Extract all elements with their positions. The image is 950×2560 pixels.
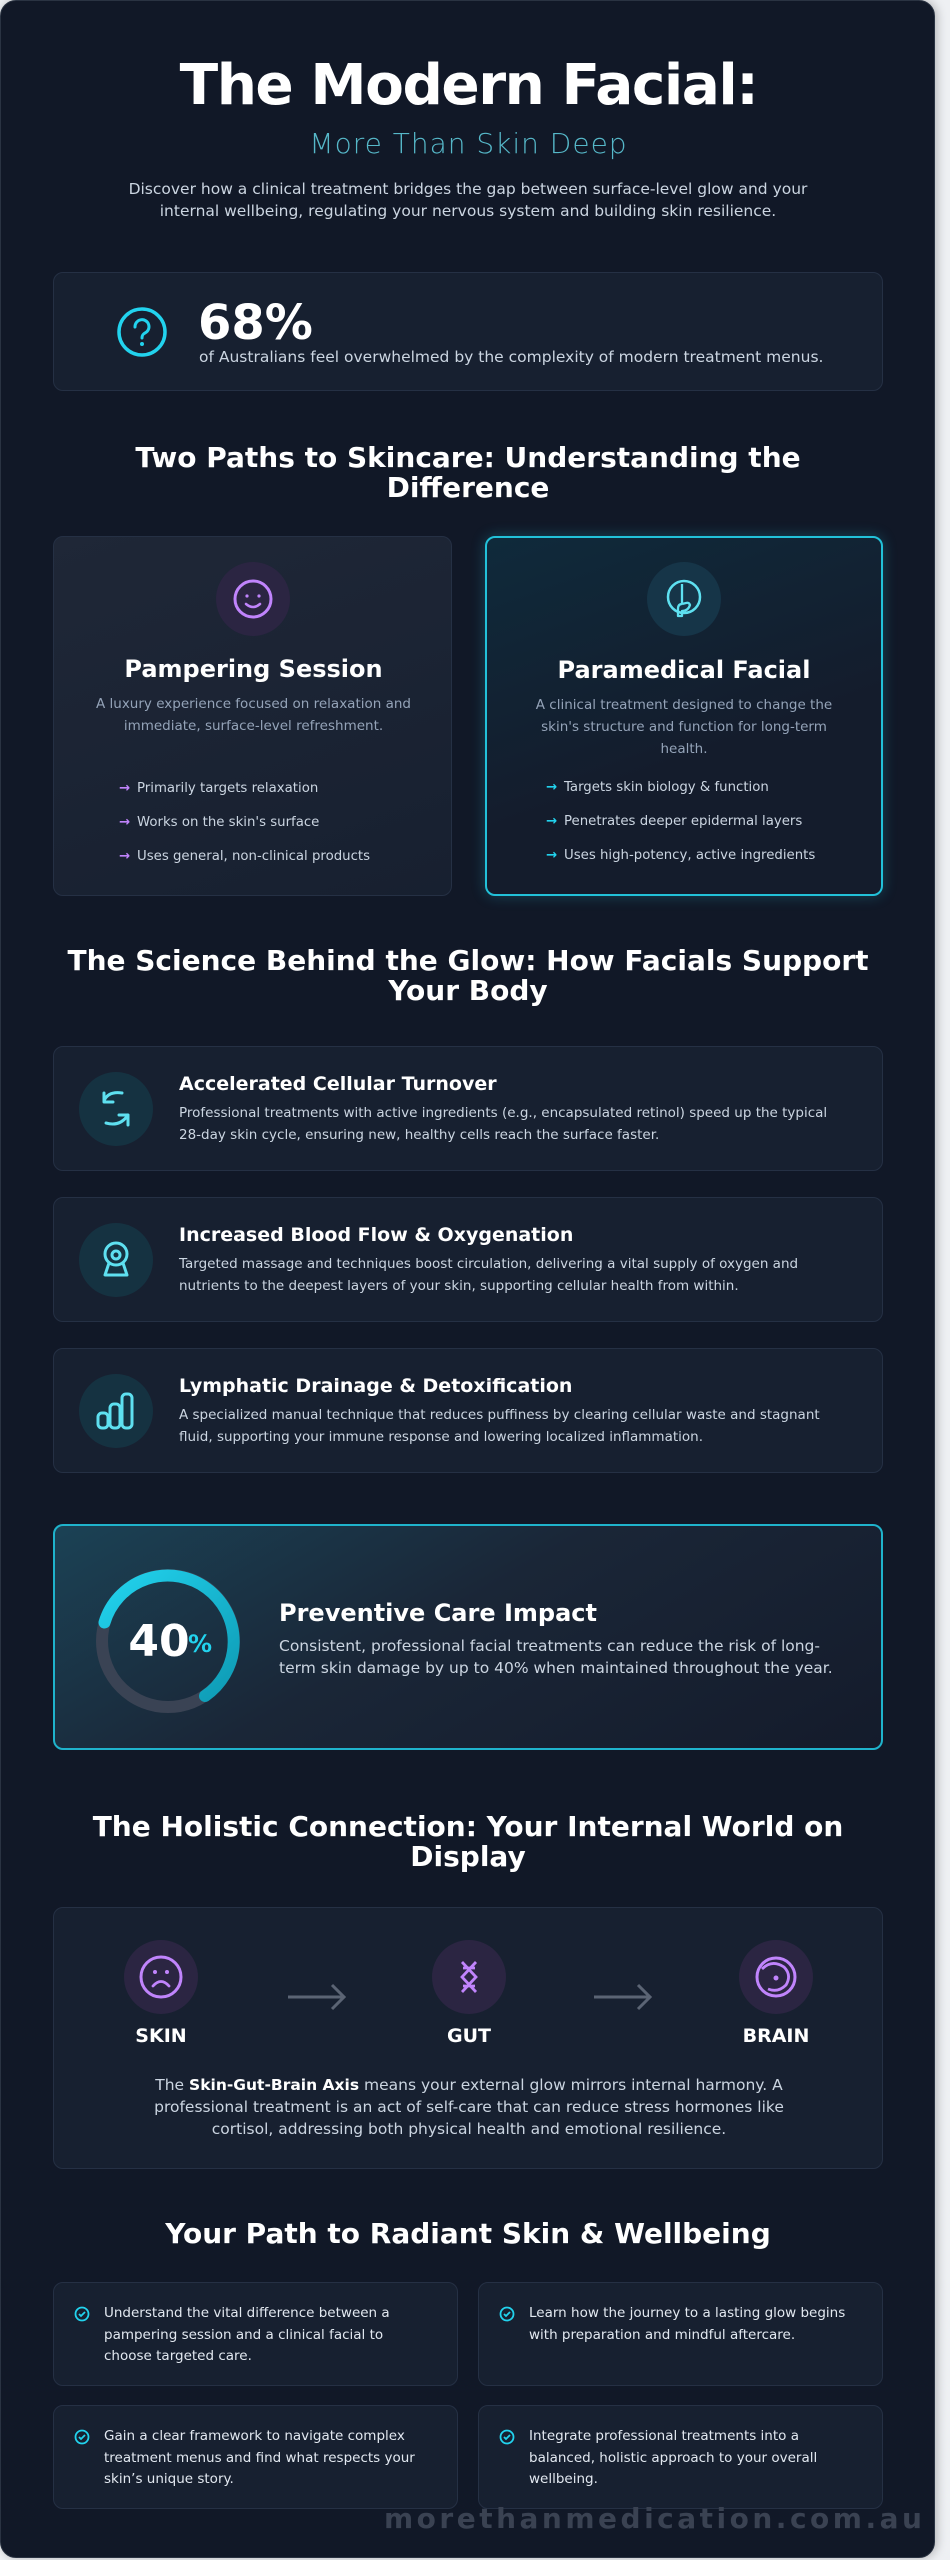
icon: gut xyxy=(432,1940,506,2014)
subtitle: More Than Skin Deep xyxy=(309,127,628,160)
bullet list xyxy=(119,781,370,864)
bullet list: → xyxy=(546,814,557,829)
panel: skin-gut-brain xyxy=(53,1907,883,2169)
checklist item 2 xyxy=(478,2282,883,2386)
panel: paramedical facial xyxy=(485,536,883,896)
heading: holistic: The Holistic Connection: Your Internal World on Display xyxy=(93,1810,843,1873)
description: Targeted massage and techniques boost circulation, delivering a vital supply of oxygen and nutrients to the deepest layers of your skin, supporting cellular health from within. xyxy=(179,1256,798,1294)
panel: pampering session xyxy=(53,536,452,896)
intro text: Discover how a clinical treatment bridges the gap between surface-level glow and your internal wellbeing, regulating your nervous system and building skin resilience. xyxy=(129,180,807,220)
icon: hand xyxy=(647,562,721,636)
chart: 40% ring: % xyxy=(188,1630,212,1658)
checklist item 4: Integrate professional treatments into a balanced, holistic approach to your overall wellbeing. xyxy=(529,2428,817,2487)
card: cellular turnover xyxy=(53,1046,883,1171)
bullet list: Targets skin biology & function xyxy=(564,780,769,795)
bullet list: → xyxy=(119,815,130,830)
title: The Modern Facial: xyxy=(180,53,757,118)
bullet list: → xyxy=(546,848,557,863)
title: Increased Blood Flow & Oxygenation xyxy=(179,1224,573,1246)
icon: pin xyxy=(79,1223,153,1297)
stat card: 68% xyxy=(53,272,883,391)
check icon xyxy=(74,2306,90,2322)
check icon xyxy=(74,2430,90,2444)
title: Preventive Care Impact xyxy=(279,1599,597,1627)
label: brain: BRAIN xyxy=(743,2025,809,2047)
icon: brain xyxy=(739,1940,813,2014)
label: gut: GUT xyxy=(447,2025,491,2047)
arrow xyxy=(594,1984,652,2010)
bullet list: → xyxy=(119,781,130,796)
bullet list xyxy=(546,780,815,863)
title: Lymphatic Drainage & Detoxification xyxy=(179,1375,572,1397)
bullet list: Penetrates deeper epidermal layers xyxy=(564,814,802,829)
checklist item 2: Learn how the journey to a lasting glow begins with preparation and mindful aftercare. xyxy=(529,2305,845,2342)
card description: A clinical treatment designed to change the skin's structure and function for long-term health. xyxy=(536,697,832,757)
checklist item 4 xyxy=(478,2405,883,2509)
heading: science: The Science Behind the Glow: How Facials Support Your Body xyxy=(67,944,869,1007)
chart: 40% ring xyxy=(96,1569,240,1713)
panel: preventive care xyxy=(53,1524,883,1750)
description: Consistent, professional facial treatments can reduce the risk of long-term skin damage by up to 40% when maintained throughout the year. xyxy=(279,1637,833,1677)
icon: question xyxy=(117,307,167,357)
bullet list: → xyxy=(546,780,557,795)
card: blood flow xyxy=(53,1197,883,1322)
stat number: 68% xyxy=(198,295,313,351)
icon: refresh xyxy=(79,1072,153,1146)
icon: smile xyxy=(216,562,290,636)
paragraph: The Skin-Gut-Brain Axis means your external glow mirrors internal harmony. A professional treatment is an act of self-care that can reduce stress hormones like cortisol, addressing both physical health and emotional resilience. xyxy=(154,2076,784,2138)
label: skin: SKIN xyxy=(135,2025,187,2047)
chart: 40% ring: 40 xyxy=(128,1616,190,1667)
card title: Paramedical Facial xyxy=(558,656,810,684)
description: Professional treatments with active ingredients (e.g., encapsulated retinol) speed up the typical 28-day skin cycle, ensuring new, healthy cells reach the surface faster. xyxy=(179,1105,827,1143)
heading: your path: Your Path to Radiant Skin & Wellbeing xyxy=(165,2217,771,2250)
icon: skin xyxy=(124,1940,198,2014)
bullet list: Primarily targets relaxation xyxy=(137,781,318,796)
bullet list: → xyxy=(119,849,130,864)
bullet list: Uses high-potency, active ingredients xyxy=(564,848,815,863)
title: Accelerated Cellular Turnover xyxy=(179,1073,497,1095)
check icon xyxy=(500,2430,514,2444)
check icon xyxy=(500,2306,514,2322)
arrow xyxy=(288,1984,346,2010)
watermark: morethanmedication.com.au xyxy=(384,2502,925,2535)
bullet list: Uses general, non-clinical products xyxy=(137,849,370,864)
description: A specialized manual technique that reduces puffiness by clearing cellular waste and stagnant fluid, supporting your immune response and lowering localized inflammation. xyxy=(179,1407,820,1445)
card description: A luxury experience focused on relaxation and immediate, surface-level refreshment. xyxy=(96,696,411,734)
bullet list: Works on the skin's surface xyxy=(137,815,319,830)
checklist item 1 xyxy=(53,2282,458,2386)
card title: Pampering Session xyxy=(124,655,383,683)
checklist item 1: Understand the vital difference between a pampering session and a clinical facial to choose targeted care. xyxy=(104,2305,390,2364)
icon: bars xyxy=(79,1374,153,1448)
card: lymphatic xyxy=(53,1348,883,1473)
stat text: of Australians feel overwhelmed by the complexity of modern treatment menus. xyxy=(199,348,823,366)
checklist item 3 xyxy=(53,2405,458,2509)
heading: two paths: Two Paths to Skincare: Understanding the Difference xyxy=(135,441,801,504)
checklist item 3: Gain a clear framework to navigate complex treatment menus and find what respects your skin’s unique story. xyxy=(104,2428,415,2487)
